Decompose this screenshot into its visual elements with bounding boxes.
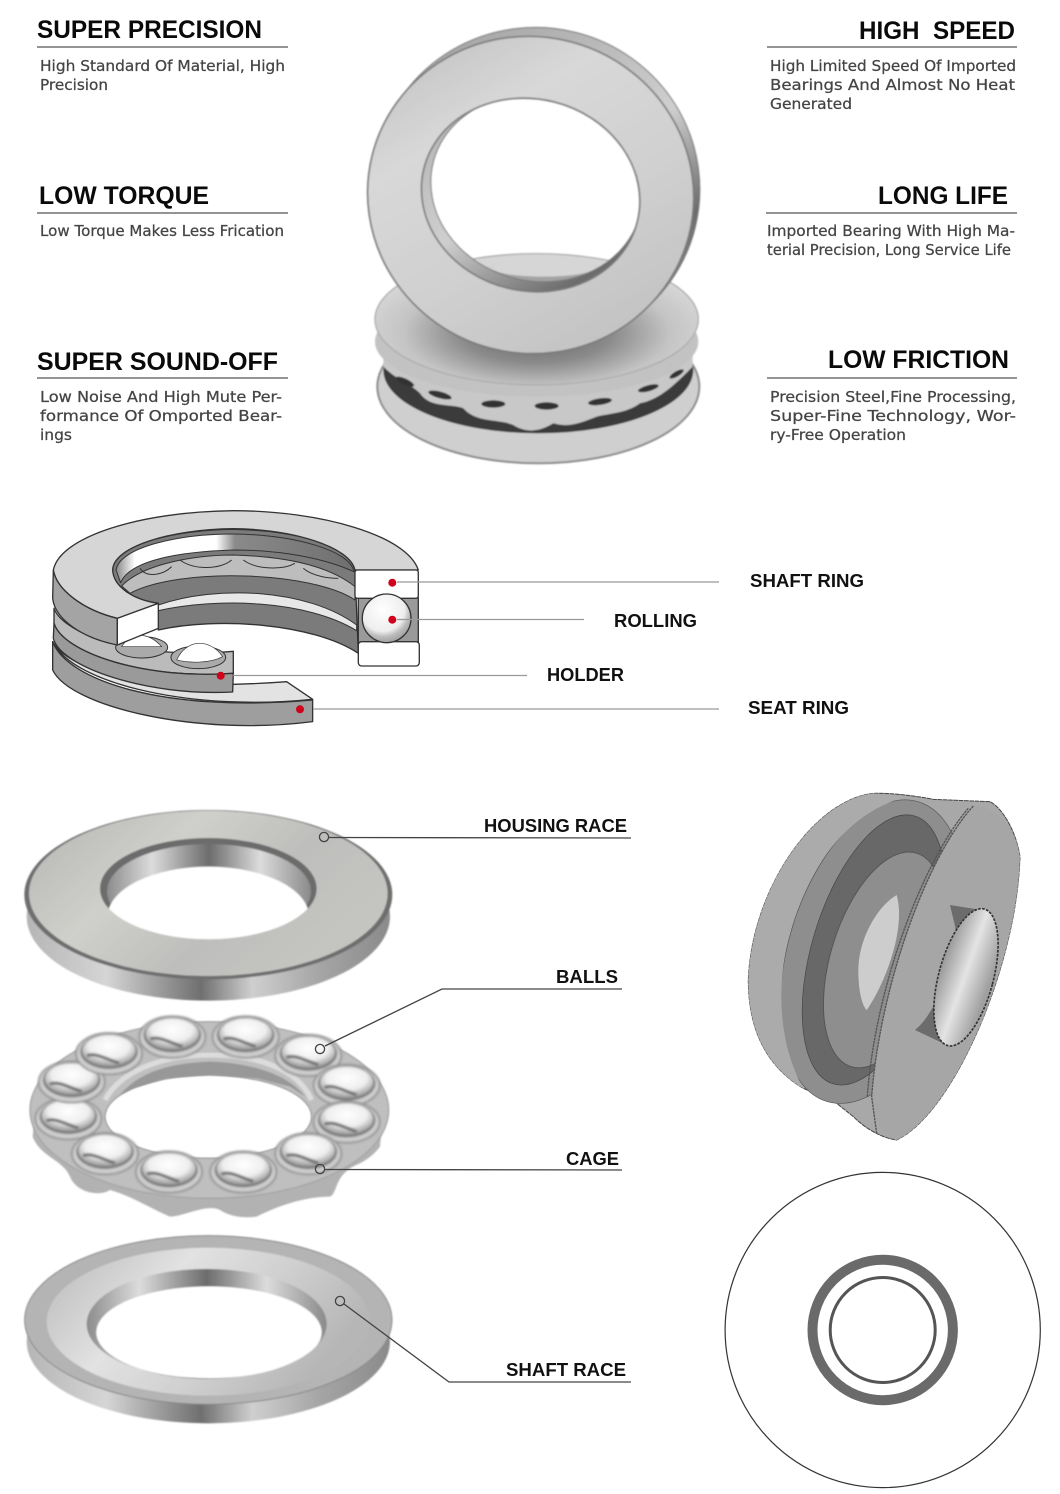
heading: LONG LIFE [878,182,1008,210]
diagram: cutaway thrust bearing [53,511,419,726]
callout: shaft race [335,1296,631,1382]
text block: Super-Fine Technology, Wor- [770,407,1016,425]
dark inner recess [774,798,974,1102]
overall silhouette [748,793,1020,1140]
inner disc [800,838,968,1082]
callout: shaft ring [388,571,864,591]
callout: rolling: ROLLING [614,611,697,631]
panel: feature long life [766,182,1017,259]
callout: balls [315,967,622,1054]
heading: HIGH SPEED [859,17,1015,45]
text block: terial Precision, Long Service Life [767,241,1011,259]
inner raceway view [113,529,358,653]
pocket tabs behind hole [120,1062,305,1097]
right lighter crescent [872,806,1020,1140]
text block: Bearings And Almost No Heat [770,76,1015,94]
callout: seat ring: SEAT RING [748,698,849,718]
heading: SUPER PRECISION [37,16,262,44]
callout: rolling [388,611,697,631]
panel: feature high speed [767,17,1017,113]
drum edge left of disc [748,793,907,1088]
callout: cage: CAGE [566,1149,619,1169]
right bore [921,902,1011,1053]
upper standing ring [334,0,734,388]
text block [767,222,1015,259]
inner lip highlight [105,1055,312,1100]
callout: cage [315,1149,622,1174]
text block: Generated [770,95,852,113]
text block: ings [40,426,72,444]
heading: LOW TORQUE [39,182,209,210]
text block: Precision Steel,Fine Processing, [770,388,1016,406]
seat ring [53,642,313,726]
text block: Imported Bearing With High Ma- [767,222,1015,240]
heading: LOW FRICTION [828,346,1009,374]
panel: feature low torque [37,182,288,240]
panel: feature super precision [37,16,288,94]
wavy cage underside [33,1033,383,1217]
text block [40,57,285,94]
central lens opening [858,895,899,1010]
text block: ry-Free Operation [770,426,906,444]
callout: shaft ring: SHAFT RING [750,571,864,591]
text block: High Standard Of Material, High [40,57,285,75]
callout: seat ring [296,698,849,718]
lower bearing assembly [375,254,699,463]
flared bore neck [915,905,982,1045]
illustration: end-view circles [725,1172,1040,1488]
shaft ring top [53,511,418,645]
panel: feature low friction [767,346,1017,444]
callout: balls: BALLS [556,967,618,987]
panel: feature super sound-off [37,348,288,444]
text block: High Limited Speed Of Imported [770,57,1016,75]
photo: thrust bearing hero [334,0,734,463]
text block: Low Torque Makes Less Frication [40,222,284,240]
photo: shaft race [25,1236,392,1423]
callout: shaft race: SHAFT RACE [506,1360,626,1380]
holder cage [53,608,233,692]
text block: Low Noise And High Mute Per- [40,388,282,406]
text block [770,57,1016,113]
heading: SUPER SOUND-OFF [37,348,278,376]
callout: holder: HOLDER [547,665,624,685]
photo: ball cage [30,1016,389,1217]
cross-section with ball [355,570,419,666]
illustration: 3D translucent bearing [747,777,1020,1140]
callout: holder [217,665,624,685]
text block [770,388,1016,444]
text block: Precision [40,76,108,94]
cage plate [30,1022,389,1198]
text block: formance Of Omported Bear- [40,407,282,425]
rim lines [867,806,973,1133]
photo: housing race [24,810,392,1001]
callout: housing race: HOUSING RACE [484,816,627,836]
callout: housing race [319,816,631,842]
twelve balls [35,1016,380,1193]
middle disc [747,777,999,1126]
text block [40,388,282,444]
